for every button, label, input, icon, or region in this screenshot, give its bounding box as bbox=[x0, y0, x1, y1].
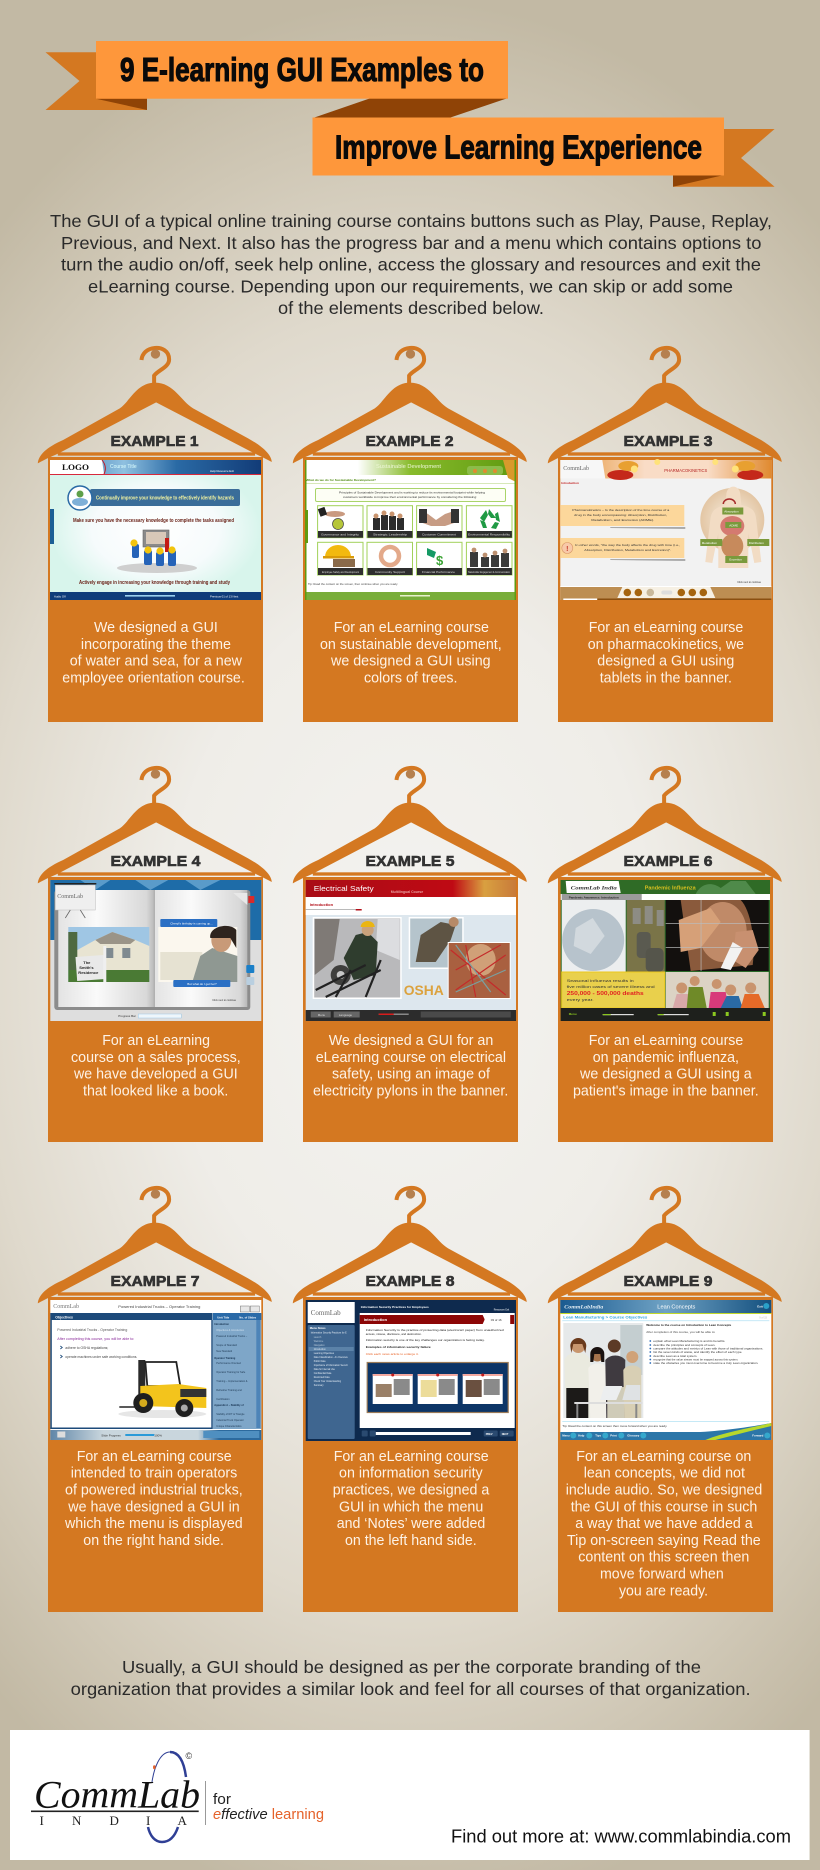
screenshot: water and sea GUI: Audio Off bbox=[54, 594, 66, 598]
screenshot: information security GUI: Information Security Practices for Employees bbox=[361, 1305, 429, 1309]
screenshot: information security GUI: PREV bbox=[486, 1433, 493, 1436]
screenshot: information security GUI: Confidential Data bbox=[314, 1372, 332, 1375]
screenshot: information security GUI: Resources Exit bbox=[494, 1308, 510, 1312]
description: For an eLearning course bbox=[334, 1449, 489, 1465]
description bbox=[573, 1033, 759, 1099]
screenshot: lean concepts GUI: recognize that the value stream must be mapped across this system. bbox=[653, 1358, 739, 1361]
screenshot: information security GUI: CommLab bbox=[311, 1309, 341, 1317]
screenshot: pharmacokinetics GUI: Metabolism bbox=[702, 541, 718, 545]
intro text: The GUI of a typical online training course contains buttons such as Play, Pause, Replay, bbox=[50, 211, 772, 231]
screenshot: pandemic influenza GUI: five million cases of severe illness and bbox=[567, 984, 655, 989]
CommLab India logo: A bbox=[178, 1813, 188, 1828]
screenshot: pharmacokinetics GUI: Excretion bbox=[729, 558, 742, 562]
screenshot: electrical safety GUI: Introduction bbox=[310, 902, 334, 907]
description: patient's image in the banner. bbox=[573, 1083, 759, 1099]
screenshot: sustainable development GUI: Financial Performance bbox=[422, 571, 456, 574]
CommLab India logo: I bbox=[40, 1813, 44, 1828]
label: EXAMPLE 4 bbox=[110, 854, 200, 870]
screenshot: pharmacokinetics GUI: CommLab bbox=[563, 466, 589, 472]
description: For an eLearning course bbox=[589, 1033, 743, 1049]
footer panel bbox=[10, 1730, 810, 1860]
screenshot: information security GUI: Launch bbox=[314, 1337, 322, 1339]
CommLab India logo: effective learning bbox=[213, 1806, 324, 1823]
screenshot: lean concepts GUI: list the seven kinds of waste, and identify the effect of each type. bbox=[653, 1351, 743, 1354]
screenshot: industrial trucks GUI: No. of Slides bbox=[239, 1316, 257, 1320]
description: course on a sales process, bbox=[71, 1050, 241, 1066]
ribbon: right fold bbox=[673, 175, 724, 187]
screenshot: pharmacokinetics GUI: drug in the body encompassing: Absorption, Distribution, bbox=[574, 513, 668, 517]
screenshot: pandemic influenza GUI: every year. bbox=[567, 997, 594, 1002]
screenshot: information security GUI: Information security is one of the key challenges our organization is facing today. bbox=[366, 1338, 485, 1342]
screenshot: industrial trucks GUI: Powered Industrial Trucks – Operator Training bbox=[118, 1304, 200, 1309]
description: on the right hand side. bbox=[83, 1533, 224, 1549]
screenshot: electrical safety GUI: Menu bbox=[318, 1013, 326, 1017]
screenshot: water and sea GUI: Make sure you have the necessary knowledge to complete the tasks assigned bbox=[73, 518, 234, 524]
description bbox=[566, 1449, 762, 1599]
screenshot: sustainable development GUI: Community Support bbox=[375, 571, 405, 574]
CommLab India logo bbox=[31, 1751, 324, 1842]
description: include audio. So, we designed bbox=[566, 1482, 762, 1498]
description: we have developed a GUI bbox=[73, 1066, 238, 1082]
card background bbox=[303, 1297, 518, 1612]
screenshot: information security GUI: Introduction bbox=[364, 1317, 388, 1322]
screenshot: electrical safety GUI: Electrical Safety bbox=[314, 884, 374, 893]
hanger bbox=[548, 348, 782, 463]
screenshot: sustainable development GUI bbox=[305, 460, 516, 600]
screenshot: sustainable development GUI: Governance and Integrity bbox=[321, 534, 360, 536]
panel: example 4 bbox=[38, 768, 272, 1142]
description: move forward when bbox=[600, 1567, 724, 1583]
screenshot: industrial trucks GUI: CommLab bbox=[53, 1304, 79, 1310]
screenshot: lean concepts GUI bbox=[560, 1300, 771, 1440]
screenshot: industrial trucks GUI: Unique Characteristics bbox=[216, 1425, 242, 1428]
hanger bbox=[38, 1188, 272, 1303]
description: eLearning course on electrical bbox=[316, 1050, 506, 1066]
description: content on this screen then bbox=[578, 1550, 749, 1566]
screenshot: pandemic influenza GUI: Pandemic Awareness: Introduction bbox=[569, 896, 619, 900]
label: EXAMPLE 1 bbox=[110, 434, 198, 450]
screenshot: sustainable development GUI: Tip: Read the content on the screen, then continue when you are ready. bbox=[308, 583, 398, 586]
screenshot: lean concepts GUI: compare the attitudes and metrics of Lean with those of traditional organizations. bbox=[653, 1347, 764, 1350]
footer background bbox=[10, 1730, 810, 1860]
description: on information security bbox=[339, 1466, 483, 1482]
description: colors of trees. bbox=[364, 670, 458, 686]
CommLab India logo: D bbox=[110, 1813, 119, 1828]
hanger bbox=[293, 768, 527, 883]
intro text: turn the audio on/off, seek help online, access the glossary and resources and exit the bbox=[61, 255, 761, 275]
CommLab India logo: CommLab bbox=[34, 1774, 200, 1817]
screenshot: lean concepts GUI: describe the principles and concepts of Lean. bbox=[653, 1344, 716, 1347]
description: We designed a GUI for an bbox=[329, 1033, 493, 1049]
screenshot: pandemic influenza GUI: 250,000 - 500,000 deaths bbox=[567, 991, 644, 997]
card background bbox=[48, 877, 263, 1142]
screenshot: industrial trucks GUI: Powered Industrial Trucks – bbox=[216, 1335, 248, 1338]
screenshot: information security GUI: Welcome bbox=[314, 1341, 324, 1343]
description: we designed a GUI using bbox=[330, 654, 491, 670]
description: GUI in which the menu bbox=[339, 1499, 483, 1515]
description bbox=[62, 620, 245, 686]
screenshot: industrial trucks GUI: Powered Industrial Trucks - Operator Training bbox=[57, 1328, 127, 1332]
screenshot: electrical safety GUI: OSHA bbox=[404, 982, 444, 998]
screenshot: pharmacokinetics GUI: ! bbox=[566, 546, 568, 553]
screenshot: sustainable development GUI: Environmental Responsibility bbox=[468, 534, 511, 536]
description: employee orientation course. bbox=[62, 670, 245, 686]
screenshot: lean concepts GUI: Exit bbox=[757, 1304, 763, 1308]
screenshot: pharmacokinetics GUI: Distribution bbox=[749, 541, 764, 545]
label: EXAMPLE 8 bbox=[366, 1274, 454, 1290]
description: electricity pylons in the banner. bbox=[313, 1083, 508, 1099]
screenshot: lean concepts GUI: Menu bbox=[562, 1434, 570, 1438]
screenshot: book GUI bbox=[50, 880, 261, 1021]
CommLab India logo: N bbox=[72, 1813, 82, 1828]
screenshot: information security GUI bbox=[306, 1300, 516, 1441]
screenshot: industrial trucks GUI: Industrial Truck Operator bbox=[216, 1419, 244, 1422]
hanger bbox=[548, 768, 782, 883]
screenshot: information security GUI: Information Security is the practice of protecting data (electronic/ paper) from unauthorized bbox=[366, 1328, 504, 1332]
ribbon: top banner bbox=[96, 41, 508, 99]
hanger bbox=[293, 1188, 527, 1303]
description: that looked like a book. bbox=[83, 1083, 228, 1099]
hanger bbox=[38, 768, 272, 883]
screenshot: pharmacokinetics GUI: Absorption bbox=[724, 510, 739, 514]
description: designed a GUI using bbox=[597, 654, 734, 670]
title ribbon bbox=[46, 41, 775, 187]
card background bbox=[48, 1297, 263, 1612]
screenshot: sustainable development GUI: Principles of Sustainable Development and is working to reduce its environmental footprint while helping bbox=[339, 492, 486, 494]
screenshot: electrical safety GUI: Language bbox=[339, 1013, 352, 1017]
screenshot: industrial trucks GUI: Stability of RIT & Triangle bbox=[216, 1413, 245, 1416]
label: EXAMPLE 9 bbox=[624, 1274, 712, 1290]
screenshot: industrial trucks GUI: 100% bbox=[154, 1434, 162, 1438]
description: lean concepts, we did not bbox=[584, 1466, 745, 1482]
description: tablets in the banner. bbox=[600, 670, 732, 686]
description: Tip on-screen saying Read the bbox=[567, 1533, 761, 1549]
screenshot: sustainable development GUI: $ bbox=[436, 553, 444, 568]
screenshot: pharmacokinetics GUI: Absorption, Distribution, Metabolism and Excretion)". bbox=[584, 548, 671, 552]
ribbon: right tail bbox=[673, 129, 775, 187]
card background bbox=[303, 877, 518, 1142]
card background bbox=[558, 877, 773, 1142]
intro text: of the elements described below. bbox=[278, 298, 544, 318]
description bbox=[71, 1033, 241, 1099]
screenshot: industrial trucks GUI: After completing this course, you will be able to: bbox=[57, 1337, 134, 1341]
screenshot: industrial trucks GUI: Refresher Training and bbox=[216, 1389, 242, 1392]
screenshot: pharmacokinetics GUI bbox=[560, 459, 771, 600]
description: we have designed a GUI in bbox=[67, 1499, 240, 1515]
screenshot: information security GUI: Click each news article to enlarge it. bbox=[366, 1352, 419, 1356]
card background bbox=[558, 457, 773, 722]
screenshot: book GUI: Residence bbox=[78, 970, 99, 975]
hanger bbox=[293, 348, 527, 463]
screenshot: pandemic influenza GUI: Seasonal influenza results in bbox=[567, 978, 634, 983]
description: For an eLearning bbox=[102, 1033, 210, 1049]
description: practices, we designed a bbox=[333, 1482, 490, 1498]
screenshot: industrial trucks GUI: Introduction bbox=[214, 1323, 229, 1326]
screenshot: industrial trucks GUI: Operator Training for Safe bbox=[216, 1371, 246, 1374]
panel: example 3 bbox=[548, 348, 782, 722]
description: a way that we have added a bbox=[575, 1516, 754, 1532]
intro text: Previous, and Next. It also has the progress bar and a menu which contains options to bbox=[61, 233, 762, 253]
description: of water and sea, for a new bbox=[70, 654, 243, 670]
screenshot: industrial trucks GUI: Scope of Standard bbox=[216, 1344, 238, 1347]
hanger bbox=[548, 1188, 782, 1303]
screenshot: lean concepts GUI: 9 of 33 bbox=[759, 1316, 768, 1320]
card background bbox=[303, 457, 518, 722]
screenshot: book GUI: Progress Bar bbox=[118, 1014, 136, 1018]
screenshot: lean concepts GUI: Welcome to the course on Introduction to Lean Concepts bbox=[646, 1323, 732, 1327]
screenshot: industrial trucks GUI: Unit Title bbox=[217, 1316, 230, 1320]
description: on pandemic influenza, bbox=[593, 1050, 739, 1066]
description bbox=[313, 1033, 508, 1099]
screenshot: lean concepts GUI: state the obstacles you must overcome to become a truly Lean organization. bbox=[653, 1362, 759, 1365]
screenshot: industrial trucks GUI: Objectives & Introduction bbox=[216, 1329, 245, 1332]
screenshot: electrical safety GUI bbox=[306, 880, 516, 1021]
panel: example 2 bbox=[293, 348, 527, 722]
screenshot: information security GUI: Examples of information security failure bbox=[366, 1345, 431, 1349]
screenshot: lean concepts GUI: Tips bbox=[595, 1434, 601, 1438]
screenshot: information security GUI: Introduction bbox=[314, 1348, 326, 1351]
panel: example 1 bbox=[38, 348, 272, 722]
ribbon: connector fold bbox=[313, 98, 508, 118]
label: EXAMPLE 2 bbox=[366, 434, 454, 450]
closing text: Usually, a GUI should be designed as per the corporate branding of the bbox=[122, 1657, 701, 1677]
screenshot: sustainable development GUI: Stakeholder Engagement & Communication bbox=[468, 571, 511, 574]
screenshot: book GUI: Cheryl's birthday is coming up... bbox=[170, 922, 213, 926]
screenshot: book GUI: The bbox=[83, 960, 91, 965]
screenshot: lean concepts GUI: explain what Lean Manufacturing is and its benefits. bbox=[653, 1340, 726, 1343]
panel: example 5 bbox=[293, 768, 527, 1142]
screenshot: industrial trucks GUI: Operator Training bbox=[214, 1357, 236, 1360]
description: we designed a GUI using a bbox=[579, 1066, 753, 1082]
screenshot: information security GUI: Restricted Data bbox=[314, 1376, 330, 1379]
CommLab India logo: for bbox=[213, 1791, 231, 1808]
description: and ‘Notes’ were added bbox=[337, 1516, 485, 1532]
screenshot: information security GUI: 03 of 16 bbox=[491, 1318, 502, 1322]
screenshot: pharmacokinetics GUI: ADME bbox=[729, 524, 738, 528]
screenshot: water and sea GUI: Course Title bbox=[110, 464, 137, 470]
screenshot: lean concepts GUI: Glossary bbox=[627, 1434, 640, 1438]
screenshot: water and sea GUI: LOGO bbox=[62, 463, 89, 472]
title line 1: 9 E-learning GUI Examples to bbox=[120, 51, 484, 88]
hanger bbox=[38, 348, 272, 463]
screenshot: pharmacokinetics GUI: Click next to continue bbox=[737, 581, 762, 584]
ribbon: left fold bbox=[96, 99, 147, 110]
screenshot: information security GUI: Information Security Practices for E bbox=[311, 1332, 347, 1334]
description bbox=[64, 1449, 243, 1549]
screenshot: lean concepts GUI: Lean Manufacturing > Course Objectives bbox=[563, 1314, 648, 1320]
screenshot: information security GUI: access, misuse, disclosure, and destruction. bbox=[366, 1332, 422, 1336]
card background bbox=[558, 1297, 773, 1612]
screenshot: sustainable development GUI: customers worldwide to improve their environmental performance by considering the following: bbox=[343, 496, 477, 499]
description: safety, using an image of bbox=[332, 1066, 491, 1082]
description: which the menu is displayed bbox=[64, 1516, 243, 1532]
screenshot: lean concepts GUI: Lean Concepts bbox=[657, 1304, 696, 1310]
screenshot: information security GUI: Data Classification - An Overview bbox=[314, 1356, 348, 1359]
screenshot: industrial trucks GUI: New Standard bbox=[216, 1350, 233, 1353]
ribbon: bottom banner bbox=[312, 118, 724, 176]
screenshot: information security GUI: Check Your Understanding bbox=[314, 1380, 342, 1383]
description: For an eLearning course bbox=[589, 620, 743, 636]
screenshot: industrial trucks GUI: Certification bbox=[216, 1398, 230, 1401]
intro text: eLearning course. Depending upon our requirements, we can skip or add some bbox=[88, 276, 733, 296]
screenshot: book GUI: Smith's bbox=[79, 965, 94, 970]
website link: Find out more at: www.commlabindia.com bbox=[451, 1827, 791, 1847]
CommLab India logo: I bbox=[146, 1813, 150, 1828]
label: EXAMPLE 5 bbox=[366, 854, 454, 870]
screenshot: industrial trucks GUI: operate machines under safe working conditions. bbox=[65, 1355, 137, 1359]
description: on the left hand side. bbox=[345, 1533, 477, 1549]
description: you are ready. bbox=[619, 1583, 708, 1599]
description: on pharmacokinetics, we bbox=[588, 637, 744, 653]
description: of powered industrial trucks, bbox=[65, 1482, 243, 1498]
description: For an eLearning course bbox=[334, 620, 489, 636]
screenshot: information security GUI: Data for Internal Use bbox=[314, 1368, 336, 1371]
panel: example 7 bbox=[38, 1188, 272, 1612]
description bbox=[320, 620, 502, 686]
screenshot: pharmacokinetics GUI: Introduction bbox=[561, 481, 579, 485]
label: EXAMPLE 6 bbox=[624, 854, 712, 870]
screenshot: pharmacokinetics GUI: PHARMACOKINETICS bbox=[664, 468, 707, 473]
screenshot: industrial trucks GUI: Appendix A – Stability of bbox=[214, 1404, 244, 1407]
screenshot: book GUI: Click next to continue bbox=[212, 999, 237, 1002]
closing text: organization that provides a similar look and feel for all courses of that organization. bbox=[71, 1679, 751, 1699]
screenshot: pharmacokinetics GUI: Metabolism, and Excretion (ADME). bbox=[591, 518, 655, 522]
screenshot: water and sea GUI: Help Resource Exit bbox=[210, 469, 234, 473]
screenshot: information security GUI: Importance of Information Securit bbox=[314, 1364, 348, 1367]
screenshot: water and sea GUI: Actively engage in increasing your knowledge through training and study bbox=[79, 580, 230, 586]
screenshot: pandemic influenza GUI: Menu bbox=[569, 1012, 577, 1016]
screenshot: industrial trucks GUI: Training – Implementation & bbox=[216, 1380, 248, 1383]
screenshot: pandemic influenza GUI: Pandemic Influenza bbox=[645, 886, 696, 892]
screenshot: information security GUI: Navigation bbox=[314, 1344, 325, 1347]
screenshot: information security GUI: Summary bbox=[314, 1384, 324, 1387]
screenshot: sustainable development GUI: What do we do for Sustainable Development? bbox=[306, 478, 376, 482]
panel: example 6 bbox=[548, 768, 782, 1142]
screenshot: water and sea GUI: Previous 01 of 13 Next bbox=[210, 594, 239, 598]
screenshot: book GUI: But what do I get her? bbox=[187, 982, 217, 986]
screenshot: pharmacokinetics GUI: In other words, "the way the body affects the drug with time (i.e., bbox=[575, 543, 681, 547]
screenshot: industrial trucks GUI bbox=[50, 1300, 261, 1440]
description: We designed a GUI bbox=[94, 620, 218, 636]
panel: example 8 bbox=[293, 1188, 527, 1612]
closing text bbox=[71, 1657, 751, 1699]
screenshot: water and sea GUI bbox=[50, 460, 261, 600]
screenshot: information security GUI: Public Data bbox=[314, 1360, 326, 1363]
description: incorporating the theme bbox=[81, 637, 231, 653]
label: EXAMPLE 3 bbox=[624, 434, 712, 450]
screenshot: lean concepts GUI: Forward bbox=[752, 1434, 764, 1438]
description: on sustainable development, bbox=[320, 637, 502, 653]
description bbox=[333, 1449, 490, 1549]
title line 2: Improve Learning Experience bbox=[335, 128, 702, 166]
description: For an eLearning course on bbox=[576, 1449, 751, 1465]
screenshot: sustainable development GUI: Customer Commitment bbox=[422, 534, 456, 536]
intro text bbox=[50, 211, 772, 318]
screenshot: electrical safety GUI: Multilingual Course bbox=[391, 890, 423, 894]
screenshot: water and sea GUI: Continually improve your knowledge to effectively identify hazards bbox=[96, 496, 234, 502]
screenshot: lean concepts GUI: Print bbox=[610, 1434, 617, 1438]
screenshot: lean concepts GUI: describe Lean as a total system. bbox=[653, 1355, 698, 1358]
screenshot: book GUI: CommLab bbox=[57, 894, 83, 900]
screenshot: sustainable development GUI: Employee Safety and Development bbox=[322, 571, 359, 574]
screenshot: sustainable development GUI: Sustainable Development bbox=[376, 464, 442, 470]
label: EXAMPLE 7 bbox=[110, 1274, 200, 1290]
screenshot: pandemic influenza GUI bbox=[561, 880, 770, 1021]
screenshot: pharmacokinetics GUI: Pharmacokinetics – Is the description of the time course of a bbox=[572, 508, 670, 512]
ribbon: left tail bbox=[46, 52, 147, 110]
card background bbox=[48, 457, 263, 722]
panel: example 9 bbox=[548, 1188, 782, 1612]
screenshot: information security GUI: Menu Notes bbox=[310, 1326, 326, 1330]
screenshot: industrial trucks GUI: Slide Progress bbox=[101, 1434, 121, 1438]
screenshot: information security GUI: Learning Objectives bbox=[314, 1352, 335, 1355]
description: For an eLearning course bbox=[77, 1449, 232, 1465]
description: the GUI of this course in such bbox=[571, 1499, 757, 1515]
screenshot: lean concepts GUI: Help bbox=[578, 1434, 585, 1438]
screenshot: industrial trucks GUI: adhere to OSHA regulations; bbox=[65, 1346, 108, 1350]
screenshot: lean concepts GUI: CommLabIndia bbox=[564, 1306, 604, 1310]
CommLab India logo: © bbox=[186, 1751, 192, 1761]
screenshot: sustainable development GUI: Strategic Leadership bbox=[373, 534, 408, 536]
screenshot: lean concepts GUI: Tip: Read the content on this screen then move forward when you are ready. bbox=[562, 1424, 667, 1428]
description: intended to train operators bbox=[71, 1466, 237, 1482]
screenshot: information security GUI: NEXT bbox=[502, 1433, 509, 1436]
screenshot: pandemic influenza GUI: CommLab India bbox=[571, 886, 617, 892]
screenshot: lean concepts GUI: After completion of this course, you will be able to: bbox=[646, 1330, 716, 1334]
screenshot: industrial trucks GUI: Performance Oriented bbox=[216, 1362, 242, 1365]
screenshot: industrial trucks GUI: Objectives bbox=[55, 1316, 73, 1320]
description bbox=[588, 620, 744, 686]
